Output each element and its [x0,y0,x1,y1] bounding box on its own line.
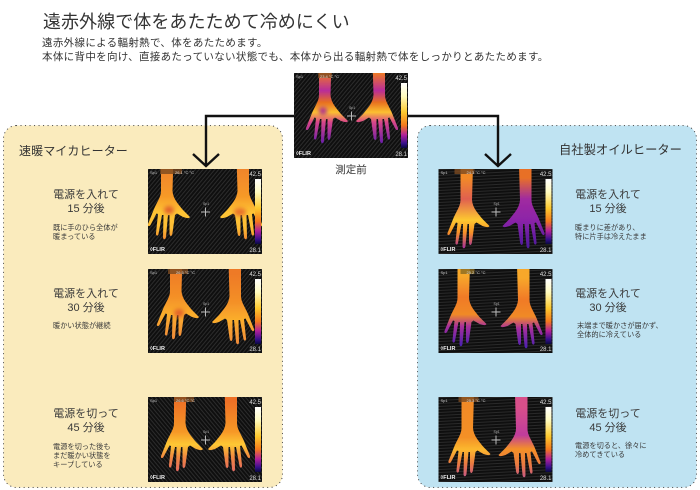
thermal image: before measurement: 42.5 [395,76,408,82]
thermal image: before measurement: ◊FLIR [296,151,311,157]
thermal image: 15 minutes: ◊FLIR [150,247,165,253]
thermal image: 45 minutes: 25.3 °C °C [466,398,486,403]
thermal image: 15 minutes: 26.1 °C °C [175,170,194,175]
note: 30 minutes: 全体的に冷えている [577,330,641,339]
thermal image: 15 minutes [148,169,262,254]
note: 15 minutes: 特に片手は冷えたまま [575,232,647,241]
note: 45 minutes: キープしている [53,460,103,469]
step label: 15 minutes: 15 分後 [589,203,627,215]
thermal image: 45 minutes: 42.5 [249,400,262,406]
note: 30 minutes [577,321,663,339]
thermal image: 15 minutes [438,169,552,254]
thermal image: 30 minutes: ◊FLIR [440,346,455,352]
thermal image: 15 minutes: 28.1 [249,248,262,254]
arrow: to mica heater [192,114,294,168]
step label: 45 minutes: 電源を切って [53,408,119,420]
panel heading: mica heater: 速暖マイカヒーター [19,144,128,158]
note: 30 minutes: 暖かい状態が継続 [53,321,111,330]
intro text: 本体に背中を向け、直接あたっていない状態でも、本体から出る輻射熱で体をしっかりとあたためます。 [42,50,549,62]
thermal image: 45 minutes: ◊FLIR [150,475,165,481]
thermal image: 30 minutes [148,269,262,353]
thermal image: before measurement: Sp1 [296,74,304,79]
thermal image: 30 minutes: Sp1 [150,270,158,275]
note: 45 minutes [53,442,111,469]
thermal image: 15 minutes: Sp1 [150,170,158,175]
thermal image: 30 minutes: ◊FLIR [150,346,165,352]
thermal image: 30 minutes: 42.5 [249,272,262,278]
thermal image: 30 minutes: 28.1 [540,347,552,353]
thermal image: 15 minutes: ◊FLIR [440,247,455,253]
thermal image: 45 minutes: ◊FLIR [440,475,455,481]
thermal image: 45 minutes: 28.1 [249,476,262,482]
note: 15 minutes: 暖まっている [53,232,95,241]
thermal image: 15 minutes: 28.1 [540,248,552,254]
note: 45 minutes: 冷めてきている [575,450,625,459]
thermal image: 15 minutes: 42.5 [249,172,262,178]
step label: 45 minutes [53,408,119,434]
note: 15 minutes: 既に手のひら全体が [53,223,118,232]
panel: mica heater [3,125,283,488]
thermal image: 15 minutes: Sp1 [203,202,209,206]
thermal image: 15 minutes: Sp1 [494,202,500,206]
thermal image: 45 minutes: Sp1 [203,430,209,434]
note: 30 minutes: 末端まで暖かさが届かず、 [577,321,663,330]
step label: 45 minutes: 45 分後 [589,422,627,434]
step label: 15 minutes: 15 分後 [67,203,105,215]
step label: 15 minutes: 電源を入れて [575,189,641,201]
thermal image: 45 minutes: 42.5 [540,400,552,406]
thermal image: 30 minutes: 28.1 [249,347,262,353]
thermal image: 15 minutes: 24.3 °C °C [466,170,486,175]
note: 15 minutes [53,223,118,241]
thermal image: 45 minutes: 26.6 °C °C [176,398,195,403]
thermal image: 45 minutes: Sp1 [494,430,500,434]
note: 45 minutes [575,441,647,459]
step label: 45 minutes [575,408,641,434]
step label: 30 minutes: 電源を入れて [53,288,119,300]
thermal image: 30 minutes: Sp1 [494,302,500,306]
step label: 30 minutes: 30 分後 [589,302,627,314]
step label: 15 minutes: 電源を入れて [53,189,119,201]
thermal image: before measurement [294,73,408,158]
thermal image: 45 minutes [438,397,552,482]
thermal image: 30 minutes: 26.5 °C °C [176,270,195,275]
step label: 30 minutes [53,288,119,314]
note: 45 minutes: 電源を切ると、徐々に [575,441,647,450]
thermal image: 30 minutes: 42.5 [540,272,552,278]
step label: 15 minutes [575,188,641,215]
note: 45 minutes: 電源を切った後も [53,442,111,451]
note: 15 minutes: 暖まりに差があり、 [575,223,639,232]
thermal image: 30 minutes [438,269,552,353]
thermal image: 45 minutes: Sp1 [440,398,448,403]
step label: 45 minutes: 45 分後 [67,422,105,434]
thermal image: 30 minutes: 25.2 °C °C [466,270,486,275]
thermal image: 45 minutes: Sp1 [150,398,158,403]
step label: 30 minutes: 30 分後 [67,302,105,314]
thermal image: 45 minutes [148,397,262,482]
panel heading: oil heater: 自社製オイルヒーター [559,143,682,157]
note: 15 minutes [575,223,647,241]
step label: 15 minutes [53,188,119,215]
panel: oil heater [417,125,697,488]
thermal image: before measurement: 23.4 °C °C [320,74,339,79]
step label: 30 minutes: 電源を入れて [575,288,641,300]
intro text: 遠赤外線による輻射熱で、体をあたためます。 [42,37,268,49]
step label: 30 minutes [575,288,641,314]
note: 45 minutes: まだ暖かい状態を [53,451,111,460]
thermal image: 45 minutes: 28.1 [540,476,552,482]
thermal image: 30 minutes: Sp1 [440,270,448,275]
thermal image: before measurement: Sp1 [349,106,355,110]
title: 遠赤外線で体をあたためて冷めにくい [43,12,350,32]
thermal image: 30 minutes: Sp1 [203,302,209,306]
intro text [42,37,549,62]
thermal image: 15 minutes: 42.5 [540,172,552,178]
step label: 45 minutes: 電源を切って [575,408,641,420]
thermal image: before measurement: 28.1 [395,152,408,158]
caption: before measurement: 測定前 [335,164,367,176]
arrow: to oil heater [408,114,512,168]
thermal image: 15 minutes: Sp1 [440,170,448,175]
